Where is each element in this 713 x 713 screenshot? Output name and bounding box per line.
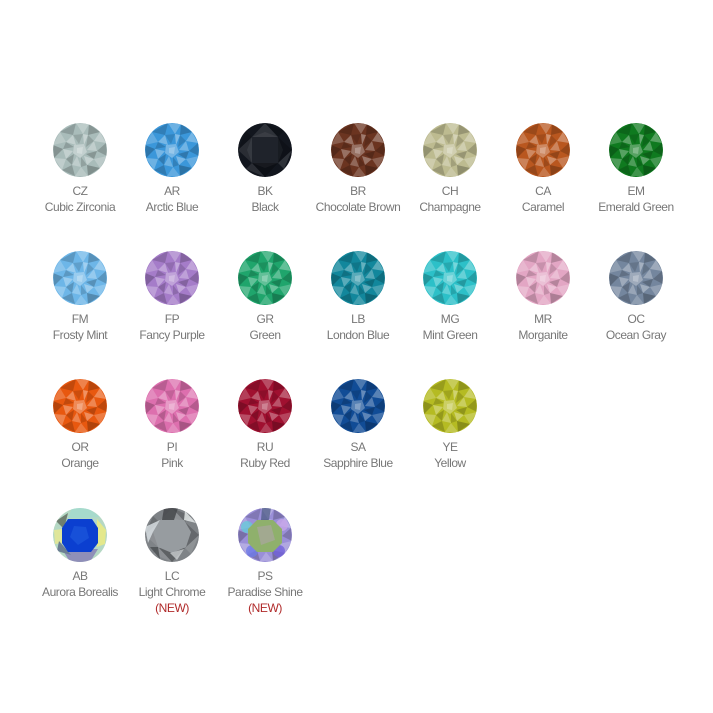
gem: FM Frosty Mint: Frosty Mint <box>53 328 108 342</box>
gem: AB Aurora Borealis <box>42 508 118 599</box>
gem: CH Champagne <box>419 123 481 214</box>
gem: EM Emerald Green <box>598 123 674 214</box>
gem: CZ Cubic Zirconia <box>45 123 116 214</box>
gem: FP Fancy Purple: FP <box>165 312 180 326</box>
gem: OC Ocean Gray: OC <box>627 312 645 326</box>
gem: FM Frosty Mint: FM <box>72 312 89 326</box>
gem: CZ Cubic Zirconia: CZ <box>72 184 88 198</box>
gem: AR Arctic Blue: Arctic Blue <box>146 200 199 214</box>
gem: RU Ruby Red: RU <box>257 440 273 454</box>
gem: PS Paradise Shine (NEW) <box>227 508 303 615</box>
gem: OR Orange: OR <box>71 440 89 454</box>
gem: GR Green: GR <box>256 312 274 326</box>
gem: LC Light Chrome (NEW): (NEW) <box>155 601 189 615</box>
gem: AR Arctic Blue: AR <box>164 184 181 198</box>
gem: PS Paradise Shine (NEW): PS <box>257 569 273 583</box>
gem: SA Sapphire Blue <box>323 379 394 470</box>
gem: YE Yellow: YE <box>442 440 458 454</box>
gem: YE Yellow <box>423 379 477 470</box>
gem: LB London Blue: London Blue <box>327 328 390 342</box>
gem: MG Mint Green: MG <box>441 312 459 326</box>
gem: AB Aurora Borealis: Aurora Borealis <box>42 585 118 599</box>
gem: LC Light Chrome (NEW): LC <box>165 569 180 583</box>
gem: FM Frosty Mint <box>53 251 108 342</box>
gem: CH Champagne: Champagne <box>419 200 481 214</box>
gem: SA Sapphire Blue: Sapphire Blue <box>323 456 394 470</box>
gem: OC Ocean Gray: Ocean Gray <box>606 328 667 342</box>
gem: SA Sapphire Blue: SA <box>350 440 366 454</box>
gem: LC Light Chrome (NEW): Light Chrome <box>139 585 206 599</box>
gem: RU Ruby Red <box>238 379 292 470</box>
gem: BR Chocolate Brown: BR <box>350 184 367 198</box>
gem: BR Chocolate Brown <box>316 123 400 214</box>
gem: MG Mint Green <box>423 251 477 342</box>
gem: PI Pink <box>145 379 199 470</box>
gem: OR Orange <box>53 379 107 470</box>
gem: BR Chocolate Brown: Chocolate Brown <box>316 200 400 214</box>
gem: BK Black <box>238 123 292 214</box>
gem: PS Paradise Shine (NEW): (NEW) <box>248 601 282 615</box>
gem: OC Ocean Gray <box>606 251 667 342</box>
gem: LB London Blue <box>327 251 390 342</box>
gem: AR Arctic Blue <box>145 123 199 214</box>
gem: EM Emerald Green: Emerald Green <box>598 200 674 214</box>
gem: MG Mint Green: Mint Green <box>423 328 477 342</box>
gem: AB Aurora Borealis: AB <box>72 569 88 583</box>
gem: LB London Blue: LB <box>351 312 365 326</box>
gem: FP Fancy Purple <box>139 251 205 342</box>
gem: CA Caramel <box>516 123 570 214</box>
gem: MR Morganite: MR <box>534 312 553 326</box>
gem: LC Light Chrome (NEW) <box>139 508 206 615</box>
gem: OR Orange: Orange <box>61 456 99 470</box>
gem: CA Caramel: Caramel <box>522 200 564 214</box>
gem: PI Pink: Pink <box>161 456 184 470</box>
gem: MR Morganite: Morganite <box>518 328 568 342</box>
gem: CH Champagne: CH <box>442 184 458 198</box>
gem: BK Black: BK <box>257 184 273 198</box>
gem: MR Morganite <box>516 251 570 342</box>
gem: RU Ruby Red: Ruby Red <box>240 456 290 470</box>
gem: CZ Cubic Zirconia: Cubic Zirconia <box>45 200 116 214</box>
gem: BK Black: Black <box>251 200 280 214</box>
gem: GR Green: Green <box>249 328 281 342</box>
gem: FP Fancy Purple: Fancy Purple <box>139 328 205 342</box>
gem: EM Emerald Green: EM <box>627 184 645 198</box>
gem: YE Yellow: Yellow <box>434 456 467 470</box>
gem: PS Paradise Shine (NEW): Paradise Shine <box>227 585 303 599</box>
gem: GR Green <box>238 251 292 342</box>
gem: PI Pink: PI <box>167 440 177 454</box>
gem: CA Caramel: CA <box>535 184 551 198</box>
